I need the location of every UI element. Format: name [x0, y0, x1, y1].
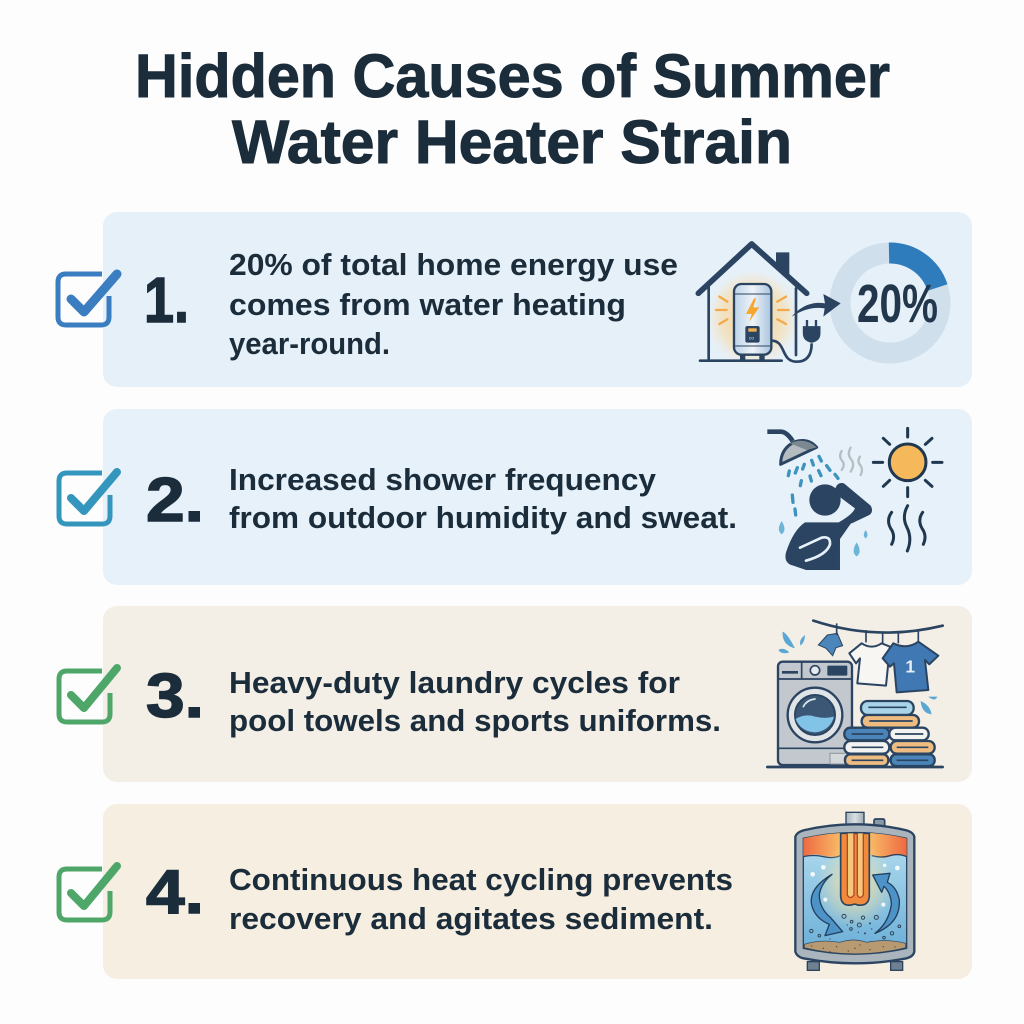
checkbox 2 [59, 472, 117, 524]
text 1: comes from water heating [229, 287, 626, 322]
card background 4 [103, 804, 972, 979]
text 4 [229, 862, 733, 936]
text 2: from outdoor humidity and sweat. [229, 500, 737, 535]
title: Hidden Causes of Summer [135, 42, 890, 110]
title [135, 42, 890, 176]
card background 2 [103, 409, 972, 585]
card background 1 [103, 212, 972, 387]
icon: washing machine and clothesline: 1 [905, 656, 915, 676]
donut chart 20%: 20% [857, 274, 938, 334]
text 1: 20% of total home energy use [229, 247, 678, 282]
text 3: pool towels and sports uniforms. [229, 703, 721, 738]
icon: person in shower with sun [767, 428, 942, 570]
number 3: 3. [146, 662, 204, 731]
donut chart 20% [840, 253, 940, 353]
panel: item 2 showers [59, 409, 972, 585]
text 1: year-round. [229, 326, 390, 361]
text 1 [229, 247, 678, 361]
text 2 [229, 462, 737, 535]
text 4: recovery and agitates sediment. [229, 901, 713, 936]
icon: washing machine and clothesline [767, 621, 943, 767]
panel: item 1 energy use [58, 212, 972, 387]
icon: house with water heater [698, 244, 841, 367]
card background 3 [103, 606, 972, 782]
checkbox 1 [58, 274, 117, 325]
icon: house with water heater: co [749, 335, 754, 340]
panel: item 3 laundry [59, 606, 972, 782]
panel: item 4 heat cycling [59, 804, 972, 979]
checkbox 3 [59, 668, 117, 722]
text 2: Increased shower frequency [229, 462, 657, 497]
text 4: Continuous heat cycling prevents [229, 862, 733, 897]
checkbox 4 [59, 866, 117, 920]
text 3: Heavy-duty laundry cycles for [229, 665, 680, 700]
title: Water Heater Strain [232, 108, 792, 176]
number 1: 1. [144, 264, 189, 336]
icon: tank cross-section with sediment [795, 812, 914, 970]
number 2: 2. [146, 466, 204, 535]
number 4: 4. [146, 858, 204, 927]
text 3 [229, 665, 721, 738]
